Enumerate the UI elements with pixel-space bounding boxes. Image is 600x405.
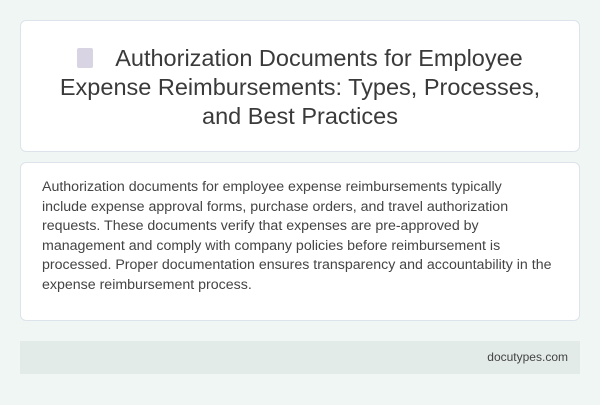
- text block: Authorization documents for employee expense reimbursements typically: [42, 179, 502, 195]
- text block: requests. These documents verify that expenses are pre-approved by: [42, 218, 479, 234]
- footer: docutypes.com: [487, 350, 568, 364]
- text block: expense reimbursement process.: [42, 277, 252, 293]
- panel: header: [20, 20, 580, 152]
- footer: [20, 341, 580, 374]
- text block: management and comply with company policies before reimbursement is: [42, 238, 500, 254]
- text block: include expense approval forms, purchase orders, and travel authorization: [42, 199, 508, 215]
- title: Authorization Documents for Employee Expense Reimbursements: Types, Processes, and Best Practices: [60, 45, 540, 129]
- panel: description: [20, 162, 580, 321]
- text block: processed. Proper documentation ensures transparency and accountability in the: [42, 257, 551, 273]
- text block: [42, 179, 551, 293]
